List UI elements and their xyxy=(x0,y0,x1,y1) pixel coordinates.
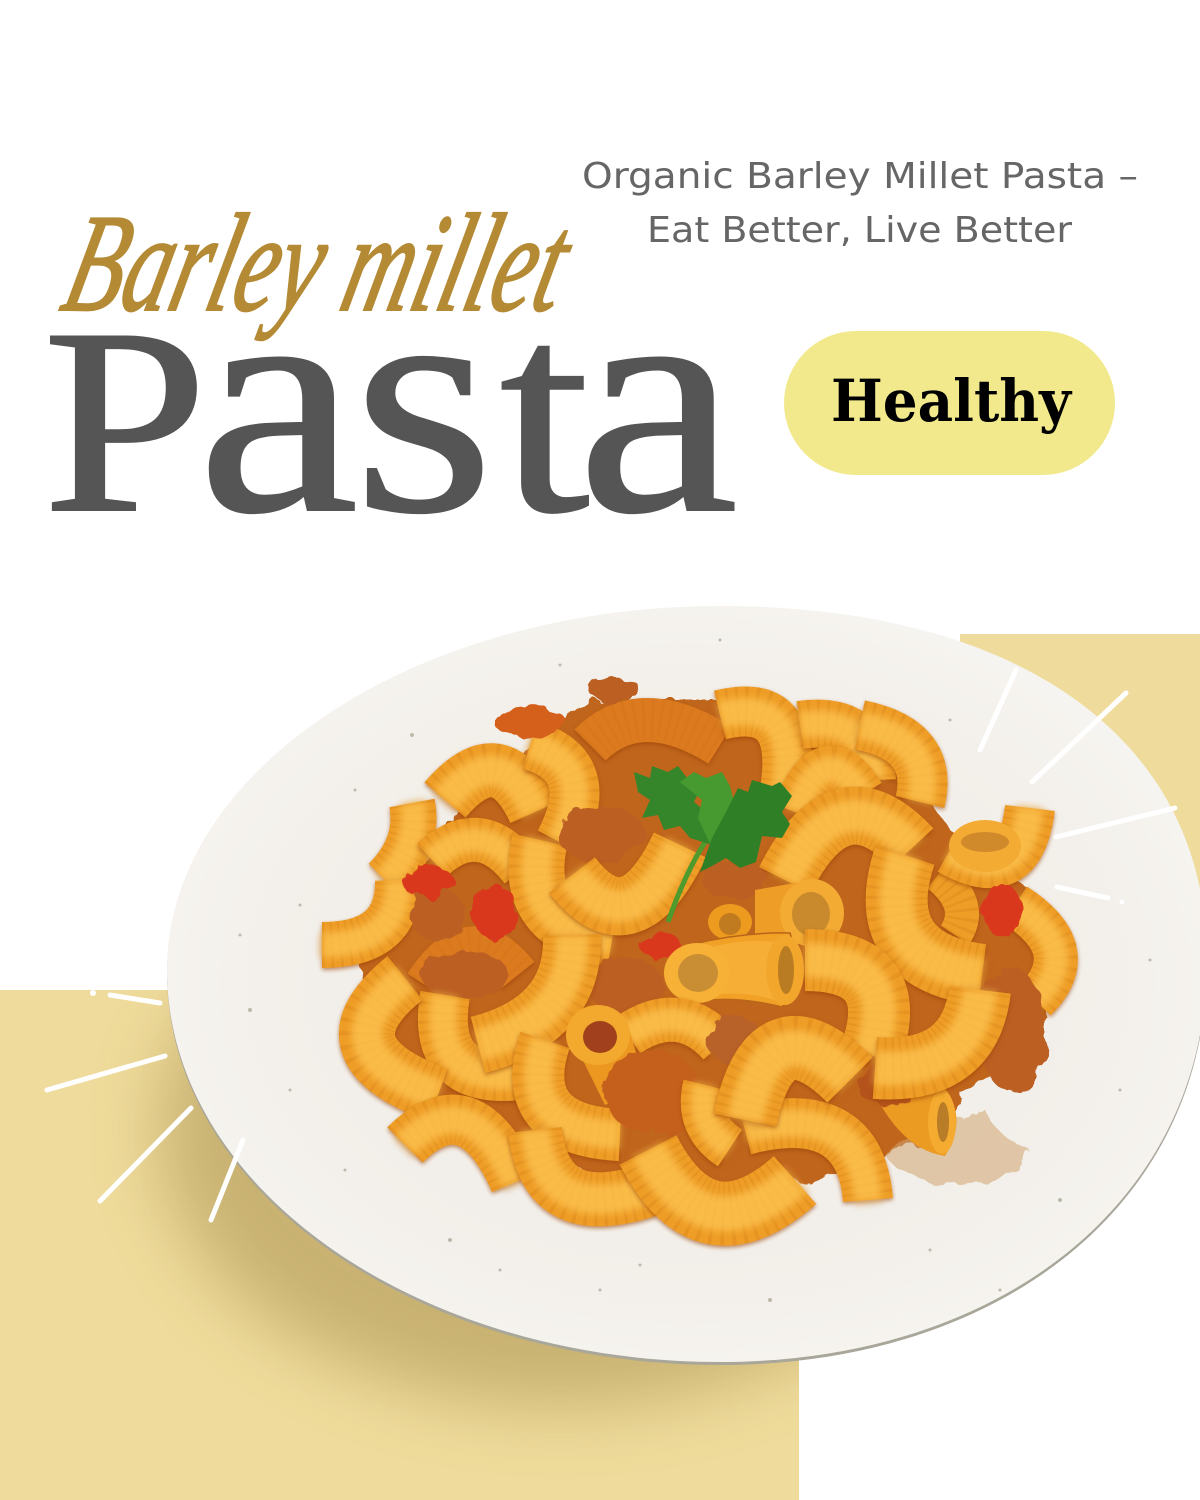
cilantro leaf xyxy=(634,766,792,922)
subtitle xyxy=(582,156,1138,251)
main title: Pasta: a xyxy=(577,221,738,581)
sunburst lines: bottom left xyxy=(47,990,243,1220)
subtitle: Organic Barley Millet Pasta – xyxy=(582,156,1138,197)
pasta tube: right xyxy=(878,1088,956,1156)
background block: top right xyxy=(960,634,1200,954)
sauce spill xyxy=(885,1110,1030,1185)
background block: bottom left xyxy=(0,990,799,1500)
white plate xyxy=(167,606,1200,1365)
pasta tube: lower xyxy=(566,1005,645,1105)
plate speckles xyxy=(238,638,1152,1302)
script title: Barley millet: Barley millet xyxy=(50,185,588,341)
sauce under pasta xyxy=(360,700,1050,1190)
main title: Pasta: t xyxy=(500,252,591,573)
pasta tube: far right xyxy=(949,820,1021,872)
badge: Healthy xyxy=(784,331,1115,475)
tomato pieces xyxy=(402,706,1022,959)
macaroni pasta xyxy=(322,678,1056,1214)
badge: Healthy: Healthy xyxy=(831,367,1073,435)
pasta tube: small xyxy=(708,879,844,947)
plate shadow xyxy=(134,1010,799,1432)
sunburst lines: top right xyxy=(980,670,1175,904)
sauce chunks xyxy=(410,678,1046,1092)
main title: Pasta: a xyxy=(197,221,359,581)
pasta tube: centre xyxy=(664,933,804,1007)
main title: Pasta: P xyxy=(43,274,208,567)
subtitle: Eat Better, Live Better xyxy=(647,210,1072,251)
sauce chunk: centre xyxy=(604,1016,763,1134)
main title: Pasta: s xyxy=(353,221,494,581)
